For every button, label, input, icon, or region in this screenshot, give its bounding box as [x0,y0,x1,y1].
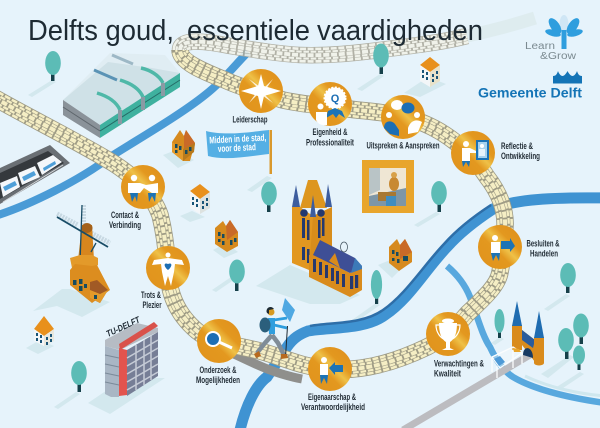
label: Verwachtingen & Kwaliteit: Verwachtingen & [434,358,484,368]
label: Trots & Plezier: Plezier [142,300,162,310]
tree [494,309,504,338]
tree [373,44,389,74]
banner: Midden in de stad [206,130,272,174]
river: northern canal [0,52,248,216]
river: branch canal [447,266,600,403]
ground shadows [26,74,584,414]
label: Verwachtingen & Kwaliteit [434,358,484,378]
footbridge [492,347,522,378]
pale lower bank [525,376,600,396]
tree [573,314,589,344]
gabled house [389,239,412,271]
label: Eigenheid & Professionaliteit: Eigenheid & [312,127,348,137]
tree [431,181,447,212]
title: Delfts goud, [28,15,174,47]
title: essentiele [187,15,310,47]
label: Leiderschap: Leiderschap [232,114,268,124]
badge: Eigenaarschap & Verantwoordelijkheid [308,347,352,391]
white building [420,57,440,87]
badge: Verwachtingen & Kwaliteit [426,312,470,356]
grey access road [403,355,530,428]
city gate [512,301,544,366]
building: library with green roof [63,53,180,138]
label: Onderzoek & Mogelijkheden [196,365,240,385]
label: Eigenheid & Professionaliteit [306,127,354,148]
tree [71,361,87,392]
badge: Reflectie & Ontwikkeling [451,131,495,175]
badge: Eigenheid & Professionaliteit [308,82,352,126]
painting [362,160,414,213]
label: Besluiten & Handelen: Besluiten & [526,238,560,248]
train tunnel [0,145,70,204]
label: Contact & Verbinding [109,210,141,230]
cobblestone road: faded far section [180,36,467,55]
badge: Eigenheid & Professionaliteit: Q [331,93,340,105]
label: Verwachtingen & Kwaliteit: Kwaliteit [434,368,461,378]
river: main canal [240,198,600,428]
windmill [57,205,110,303]
logo: Learn & Grow: Learn [525,41,555,52]
badge: Leiderschap [239,69,283,113]
label: Onderzoek & Mogelijkheden: Mogelijkheden [196,375,240,385]
white building [34,316,54,346]
cobblestone road: main route [0,50,505,369]
label: Reflectie & Ontwikkeling: Ontwikkeling [501,151,540,161]
label: Eigenaarschap & Verantwoordelijkheid: Eigenaarschap & [308,392,356,402]
tree [573,346,585,370]
label: Reflectie & Ontwikkeling: Reflectie & [501,141,533,151]
label: Eigenaarschap & Verantwoordelijkheid: Verantwoordelijkheid [301,402,365,412]
label: Trots & Plezier: Trots & [141,290,161,300]
white building [190,184,210,214]
badge: Contact & Verbinding [121,165,165,209]
TU Delft building [105,314,158,397]
badge: Onderzoek & Mogelijkheden [197,319,241,363]
TU Delft building: TU-DELFT [105,314,143,339]
label: Contact & Verbinding: Contact & [111,210,139,220]
label: Onderzoek & Mogelijkheden: Onderzoek & [200,365,237,375]
label: Eigenheid & Professionaliteit: Professionaliteit [306,138,354,148]
gabled house [172,130,195,161]
badge: Trots & Plezier [146,246,190,290]
logo: Learn & Grow: &Grow [540,51,577,62]
label: Eigenaarschap & Verantwoordelijkheid [301,392,365,412]
tree [558,328,574,359]
gabled house [215,220,238,252]
tree [560,263,576,293]
label: Trots & Plezier [141,290,162,310]
title: vaardigheden [317,15,483,47]
label: Reflectie & Ontwikkeling [501,141,540,161]
road shadow under hiker [234,354,302,379]
label: Besluiten & Handelen: Handelen [530,248,558,258]
badge: Uitspreken & Aanspreken [381,95,425,139]
label: Uitspreken & Aanspreken: Uitspreken & Aanspreken [366,140,440,150]
title [28,15,483,47]
banner: Midden in de stad: voor de stad [218,142,256,155]
logo: Gemeente Delft [478,71,583,100]
river: canal bank shading [310,205,491,326]
tree [229,260,245,291]
tree [371,270,382,304]
badge: Besluiten & Handelen [478,225,522,269]
label: Besluiten & Handelen [526,238,560,258]
faded road end [467,18,535,36]
banner: Midden in de stad: Midden in de stad, [209,133,267,146]
logo: Learn & Grow [525,15,584,62]
church [292,180,362,297]
label: Contact & Verbinding: Verbinding [109,220,141,230]
tree [261,182,277,212]
logo: Gemeente Delft: Gemeente Delft [478,86,583,100]
tree [45,51,61,81]
hiker [254,298,295,359]
